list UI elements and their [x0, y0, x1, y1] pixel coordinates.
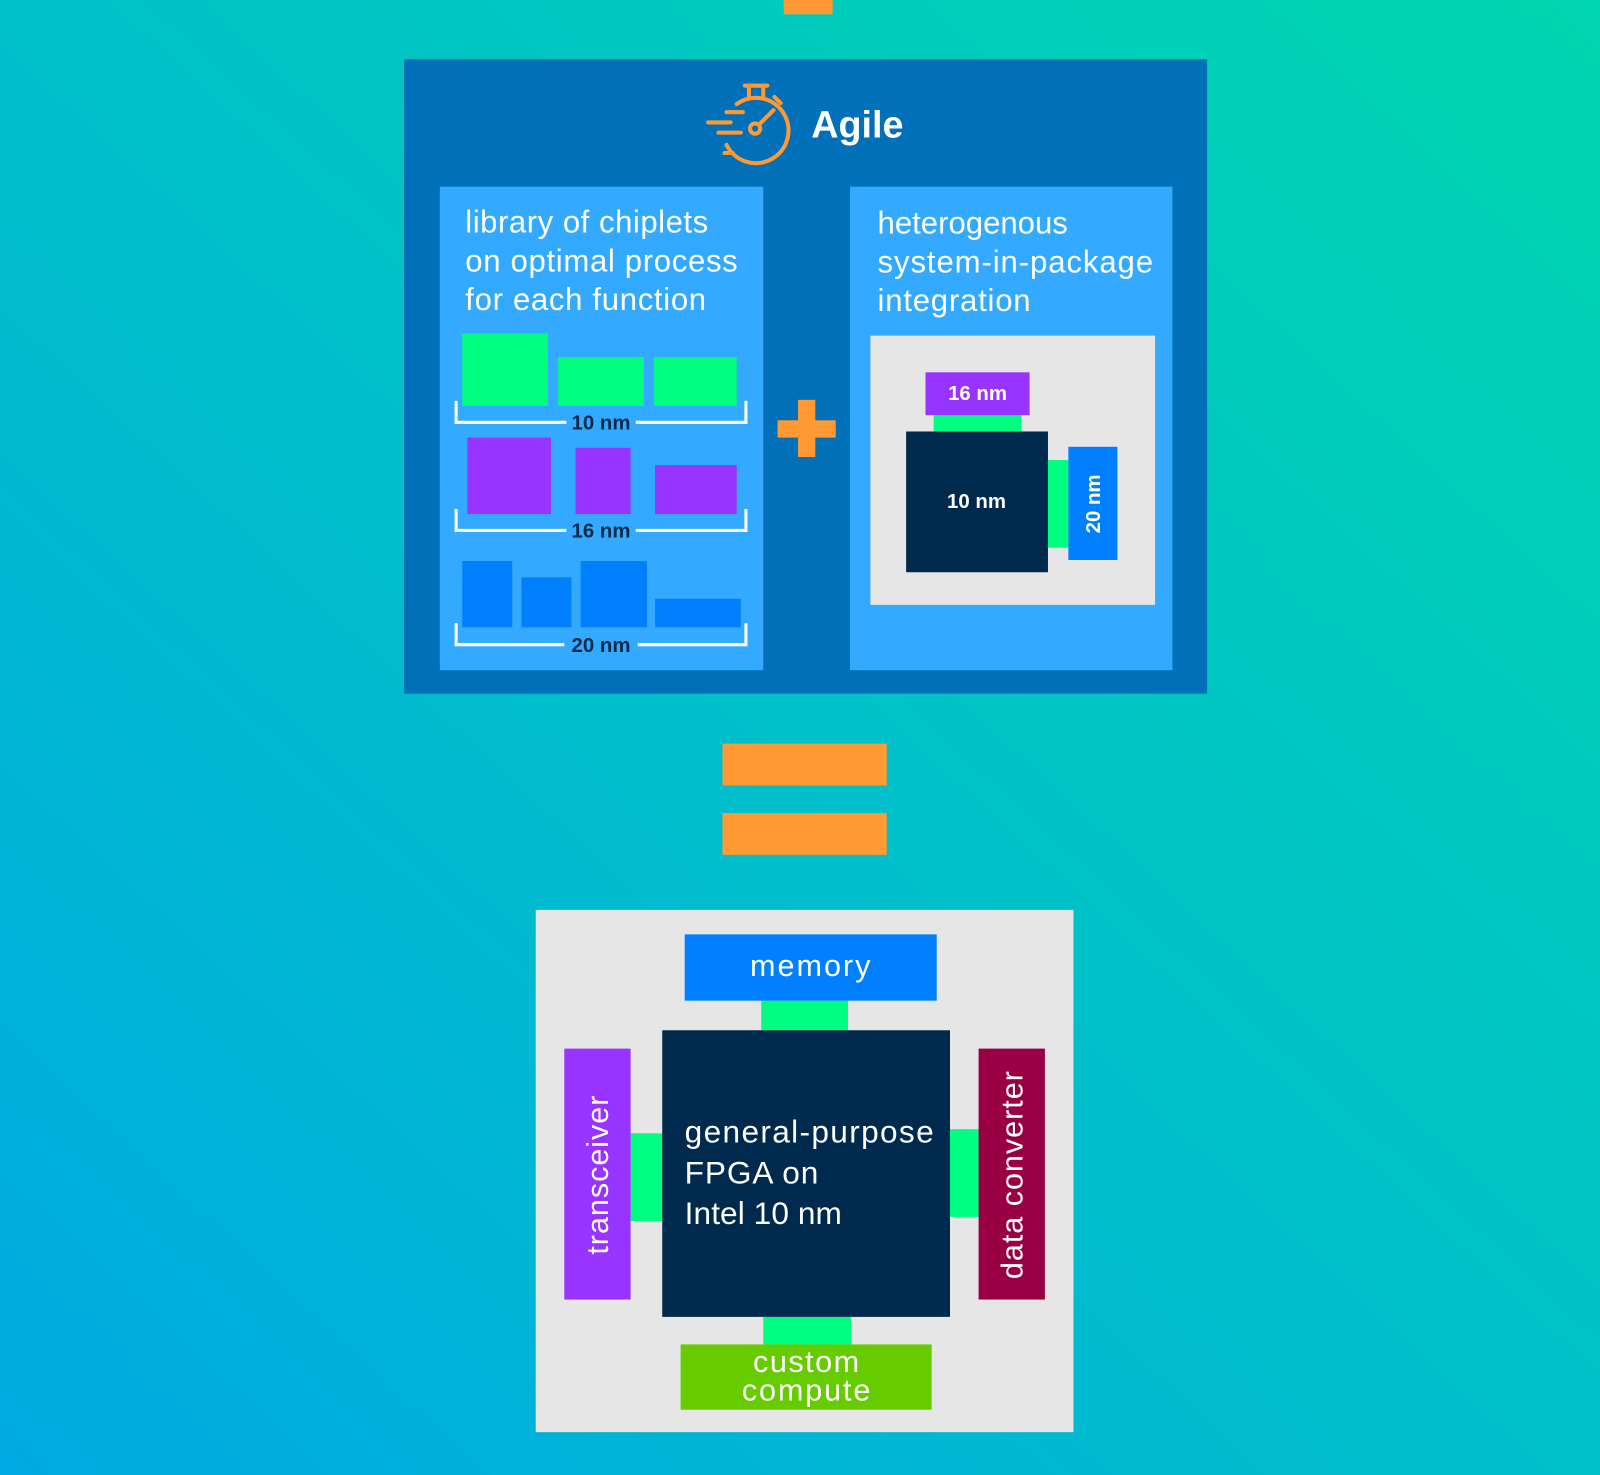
memory chiplet [685, 934, 937, 1001]
transceiver chiplet: transceiver [581, 1096, 615, 1255]
panel: system-in-package: 20 nm [1083, 474, 1105, 533]
FPGA core: FPGA on [685, 1154, 818, 1190]
memory chiplet: memory [750, 949, 871, 983]
panel: system-in-package: 10 nm [947, 491, 1006, 513]
FPGA core: general-purpose [685, 1113, 934, 1149]
panel: library of chiplets: 10 nm [572, 412, 630, 434]
panel: library of chiplets: on optimal process [465, 243, 738, 278]
custom compute chiplet: compute [742, 1374, 870, 1408]
icon: stopwatch [708, 86, 789, 163]
title: Agile [811, 104, 904, 146]
panel: system-in-package: 16 nm [948, 383, 1007, 405]
custom compute chiplet [681, 1344, 932, 1410]
panel: library of chiplets: 20 nm [572, 635, 630, 657]
custom compute chiplet: custom [753, 1345, 859, 1379]
panel: library of chiplets: library of chiplets [465, 205, 708, 240]
panel: resulting FPGA package [536, 910, 1073, 1432]
transceiver chiplet [564, 1049, 631, 1300]
panel: library of chiplets: 16 nm [572, 521, 630, 543]
panel: library of chiplets: for each function [465, 282, 706, 317]
top connector bar [784, 0, 833, 14]
FPGA core [662, 1030, 950, 1317]
panel: system-in-package: system-in-package [878, 244, 1153, 279]
panel: system-in-package: integration [878, 283, 1031, 318]
panel: system-in-package: heterogenous [878, 206, 1068, 241]
panel: library of chiplets [440, 187, 763, 670]
FPGA core: Intel 10 nm [685, 1195, 842, 1231]
data converter chiplet [979, 1049, 1045, 1300]
data converter chiplet: data converter [995, 1071, 1029, 1279]
panel: agile [404, 59, 1207, 694]
icon: equals [722, 744, 887, 855]
icon: plus [778, 400, 836, 457]
panel: system-in-package [850, 187, 1172, 670]
